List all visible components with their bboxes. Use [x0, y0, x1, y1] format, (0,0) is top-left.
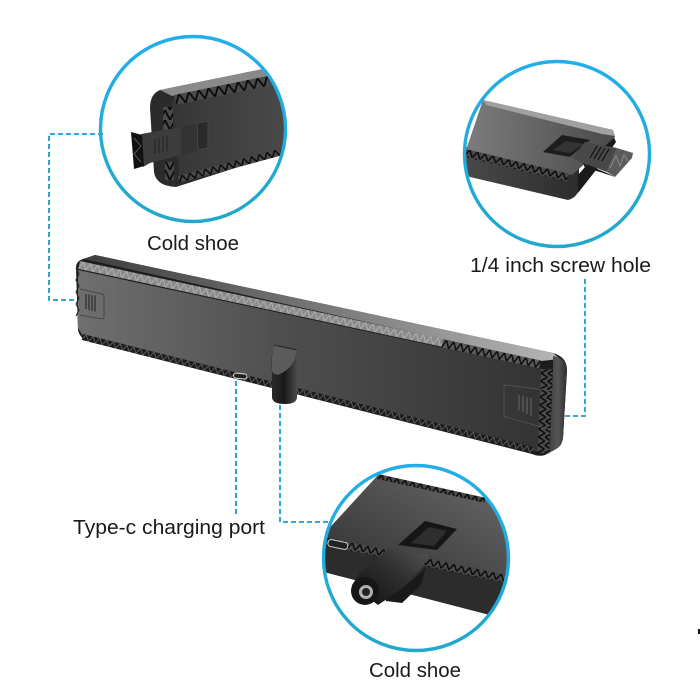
detail circle: top cold shoe: [100, 36, 300, 222]
label: screw hole: 1/4 inch screw hole: [470, 255, 651, 277]
top triangle strip: [377, 474, 485, 503]
upper triangle strip: [174, 76, 272, 104]
right tab outline and ridges: [504, 385, 553, 430]
front side wall: [326, 546, 504, 614]
tab handle: [141, 127, 181, 167]
label: charging port: Type-c charging port: [73, 517, 265, 539]
face: [326, 476, 507, 575]
left tab outline and ridges: [80, 289, 104, 319]
left edge zigzag: [76, 268, 79, 316]
top ridge: [483, 100, 615, 136]
upper light triangle strip: [78, 261, 444, 347]
upper dark triangle strip: [441, 340, 541, 368]
main light bar product: [76, 255, 567, 456]
top bevel: [84, 255, 560, 361]
tab ridges: [155, 136, 167, 154]
slot: [398, 521, 457, 550]
lower triangle strip: [178, 148, 284, 183]
body: [150, 69, 273, 187]
adapter barrel: [352, 547, 429, 605]
tab underside: [583, 163, 615, 177]
small dot artifact: [698, 629, 700, 634]
tab end: [607, 148, 633, 177]
label: cold shoe bottom: Cold shoe: [369, 660, 461, 682]
cold shoe mount: [271, 345, 297, 404]
slot: [543, 135, 590, 157]
tab end: [131, 132, 144, 169]
detail circle: bottom cold shoe: [320, 466, 512, 650]
right side: [578, 135, 616, 193]
lower triangle strip: [82, 334, 534, 453]
tab ridges: [590, 146, 609, 161]
front face: [78, 270, 542, 452]
face: [172, 86, 284, 176]
triangle strip: [464, 149, 569, 182]
top face: [466, 100, 615, 175]
callout line: bottom cold shoe: [280, 405, 330, 522]
detail circle: screw hole: [460, 62, 650, 246]
top bevel: [160, 69, 268, 96]
bar body silhouette: [76, 255, 567, 456]
callout line: screw hole: [545, 279, 585, 416]
label: cold shoe top: Cold shoe: [147, 233, 239, 255]
ring: [324, 466, 508, 650]
callout line: top cold shoe: [49, 134, 103, 300]
lower front wall band: [326, 572, 488, 614]
mount foot: [385, 566, 426, 603]
callout line: charging port: [235, 381, 237, 516]
lower triangle strip: [323, 537, 511, 584]
right triangle strip: [537, 369, 553, 453]
USB port: [327, 539, 348, 550]
tab handle: [572, 142, 617, 172]
barrel end: [351, 577, 379, 605]
lower side wall: [460, 146, 579, 200]
ring: [100, 36, 286, 222]
threaded insert: [359, 585, 373, 599]
left triangle strips: [163, 107, 173, 132]
slot: [180, 121, 208, 155]
right rim: [545, 356, 567, 455]
ring: [464, 62, 650, 246]
USB-C port: [233, 373, 247, 379]
